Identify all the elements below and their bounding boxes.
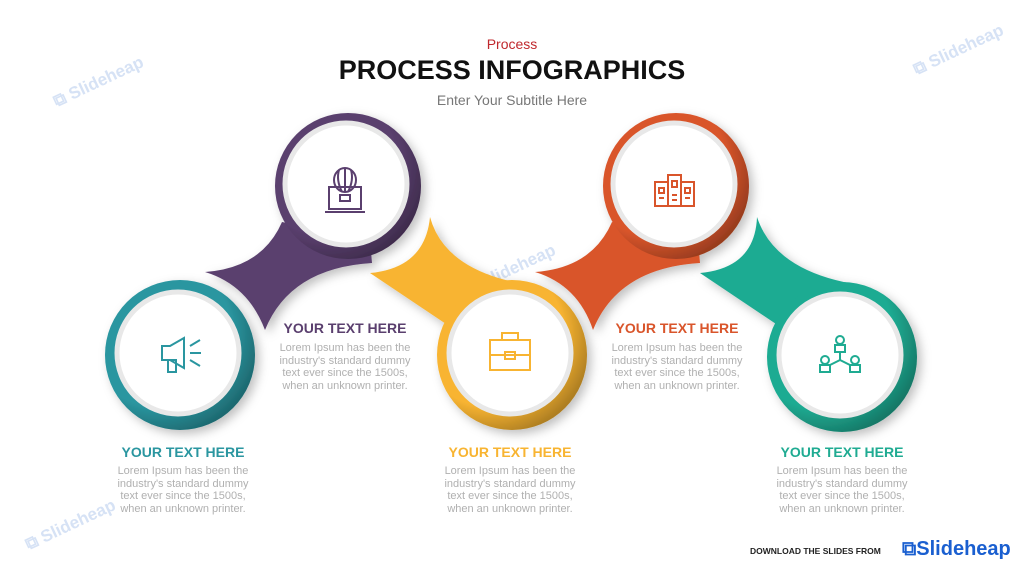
text: industry's standard dummy [776,478,908,490]
subtitle: Enter Your Subtitle Here [437,92,587,108]
title: PROCESS INFOGRAPHICS [339,55,685,85]
step 5 green [700,217,917,432]
step 3 yellow [370,217,587,430]
text: text ever since the 1500s, [779,490,905,502]
text: text ever since the 1500s, [282,367,408,379]
watermark: ⧉ Slideheap [22,495,118,554]
icon: buildings [655,175,694,206]
text: text ever since the 1500s, [614,367,740,379]
text: when an unknown printer. [282,380,408,392]
text: when an unknown printer. [447,502,573,514]
text: when an unknown printer. [120,502,246,514]
footer [750,538,1011,560]
step 1 teal [105,280,255,430]
text: text ever since the 1500s, [120,490,246,502]
footer: ⧉Slideheap [902,538,1011,560]
icon: briefcase [490,333,530,370]
text 3: YOUR TEXT HERE [449,444,571,460]
step 4 orange [535,113,749,330]
text: when an unknown printer. [779,502,905,514]
step 2 purple [205,113,421,330]
text 1: YOUR TEXT HERE [122,444,244,460]
text: industry's standard dummy [611,354,743,366]
text: Lorem Ipsum has been the [445,465,575,477]
text: Lorem Ipsum has been the [777,465,907,477]
text: Lorem Ipsum has been the [280,342,410,354]
text 2: YOUR TEXT HERE [284,320,406,336]
watermark: ⧉ Slideheap [910,20,1006,79]
text: Lorem Ipsum has been the [118,465,248,477]
text 4: YOUR TEXT HERE [616,320,738,336]
text: Lorem Ipsum has been the [612,342,742,354]
text: when an unknown printer. [614,380,740,392]
text: text ever since the 1500s, [447,490,573,502]
inner white circles [117,123,901,416]
icon: balloon laptop [325,168,365,212]
footer: DOWNLOAD THE SLIDES FROM [750,546,881,556]
watermark: ⧉ Slideheap [50,52,146,111]
icon: network people [820,336,860,372]
icon: megaphone [162,338,201,372]
text: industry's standard dummy [279,354,411,366]
text: industry's standard dummy [117,478,249,490]
watermark: ⧉ Slideheap [462,240,558,299]
text: industry's standard dummy [444,478,576,490]
kicker: Process [487,36,537,52]
text 5: YOUR TEXT HERE [781,444,903,460]
